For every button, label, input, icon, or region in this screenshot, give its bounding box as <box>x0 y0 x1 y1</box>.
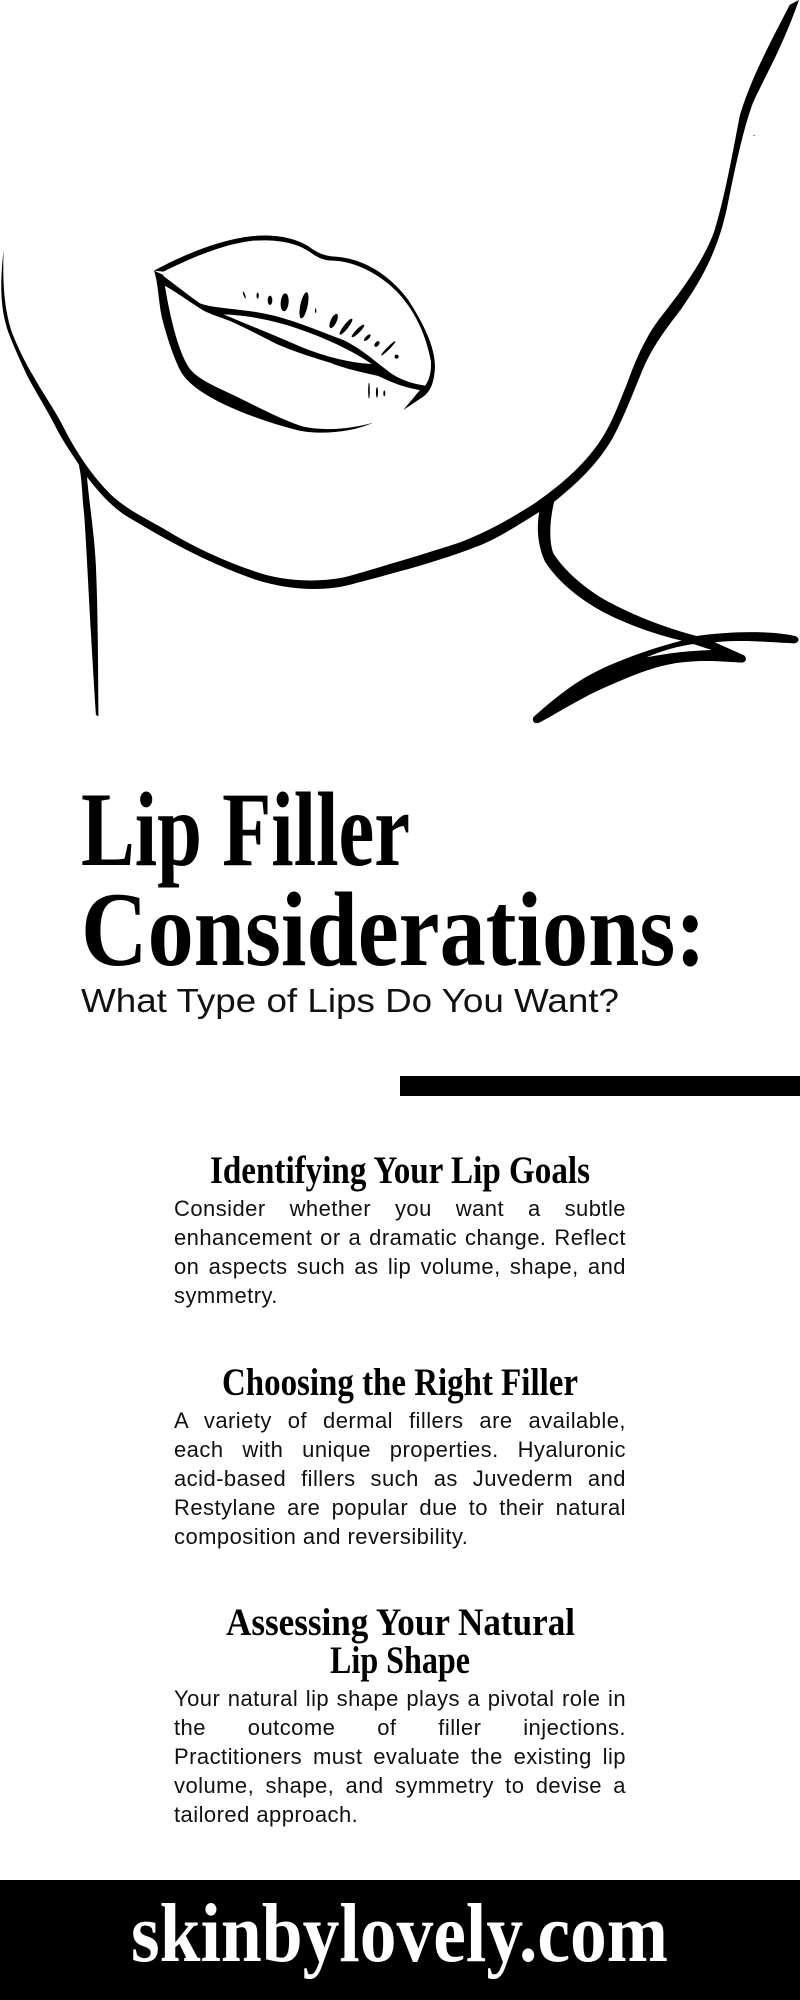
divider bar <box>400 1076 800 1096</box>
body text: A variety of dermal fillers are available, <box>174 1408 626 1433</box>
title <box>81 780 706 1019</box>
lips <box>154 236 435 433</box>
body text: Consider whether you want a subtle <box>174 1196 626 1221</box>
right neck and shoulder line <box>533 498 799 723</box>
heading: Lip Shape <box>330 1639 470 1682</box>
heading <box>226 1601 575 1682</box>
mouth opening <box>161 274 425 391</box>
face and jaw outline <box>1 0 799 589</box>
left neck line <box>78 460 98 716</box>
body text: on aspects such as lip volume, shape, and <box>174 1254 626 1279</box>
body text: acid-based fillers such as Juvederm and <box>174 1466 626 1491</box>
body text: enhancement or a dramatic change. Reflect <box>174 1225 626 1250</box>
body text: Restylane are popular due to their natural <box>174 1495 626 1520</box>
section: assessing your natural lip shape <box>174 1601 626 1827</box>
title line 2: Considerations: <box>81 871 706 988</box>
illustration: face line art <box>1 0 799 724</box>
body text: composition and reversibility. <box>174 1524 468 1549</box>
body text <box>174 1686 626 1827</box>
heading: Assessing Your Natural <box>226 1601 575 1644</box>
body text: Practitioners must evaluate the existing lip <box>174 1744 626 1769</box>
lower lip contour <box>154 271 373 433</box>
body text <box>174 1196 626 1308</box>
section: identifying your lip goals <box>174 1150 626 1308</box>
footer website: skinbylovely.com <box>131 1887 668 1980</box>
body text: symmetry. <box>174 1283 278 1308</box>
footer band <box>0 1880 800 2000</box>
section: choosing the right filler <box>174 1362 626 1549</box>
body text: each with unique properties. Hyaluronic <box>174 1437 626 1462</box>
lip texture marks <box>242 291 399 399</box>
body text: Your natural lip shape plays a pivotal role in <box>174 1686 626 1711</box>
body text: tailored approach. <box>174 1802 358 1827</box>
upper lip contour <box>154 236 435 410</box>
body text: volume, shape, and symmetry to devise a <box>174 1773 626 1798</box>
body text <box>174 1408 626 1549</box>
body text: the outcome of filler injections. <box>174 1715 626 1740</box>
subtitle: What Type of Lips Do You Want? <box>81 982 619 1019</box>
